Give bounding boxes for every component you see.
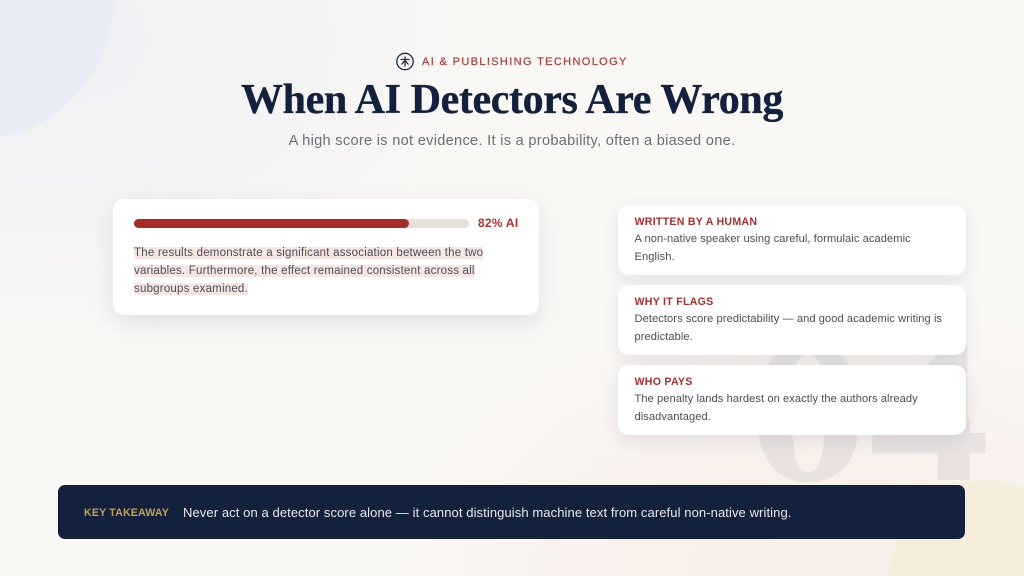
subtitle: A high score is not evidence. It is a probability, often a biased one. bbox=[289, 133, 735, 149]
takeaway banner bbox=[58, 485, 965, 539]
card body: Detectors score predictability — and good academic writing is bbox=[634, 313, 942, 325]
card heading: WHO PAYS bbox=[634, 376, 693, 388]
eyebrow label: AI & PUBLISHING TECHNOLOGY bbox=[422, 56, 628, 68]
eyebrow bbox=[396, 52, 628, 70]
highlighted sample text bbox=[134, 246, 483, 295]
highlighted sample text: The results demonstrate a significant association between the two bbox=[134, 246, 483, 258]
takeaway label: KEY TAKEAWAY bbox=[84, 506, 169, 518]
panel: detector result bbox=[113, 199, 539, 315]
card body: predictable. bbox=[634, 331, 693, 343]
score bar fill bbox=[134, 219, 409, 228]
card body: disadvantaged. bbox=[634, 411, 711, 423]
score bar track bbox=[134, 219, 469, 228]
card body bbox=[634, 233, 911, 263]
title: When AI Detectors Are Wrong bbox=[241, 77, 783, 123]
takeaway text: Never act on a detector score alone — it cannot distinguish machine text from careful non-native writing. bbox=[183, 504, 791, 520]
card body bbox=[634, 313, 942, 343]
card: written by a human bbox=[618, 205, 966, 275]
card heading: WHY IT FLAGS bbox=[634, 296, 713, 308]
decorative circle: top left bbox=[0, 0, 114, 137]
ghost number: 04 bbox=[748, 298, 990, 525]
card: who pays bbox=[618, 365, 966, 435]
highlighted sample text: subgroups examined. bbox=[134, 283, 248, 295]
icon: asterisk badge bbox=[396, 52, 414, 70]
decorative circle: bottom right bbox=[890, 480, 1024, 576]
card body: English. bbox=[634, 251, 675, 263]
card heading: WRITTEN BY A HUMAN bbox=[634, 216, 757, 228]
card body: A non-native speaker using careful, formulaic academic bbox=[634, 233, 911, 245]
score label: 82% AI bbox=[478, 216, 518, 230]
card: why it flags bbox=[618, 285, 966, 355]
card body: The penalty lands hardest on exactly the authors already bbox=[634, 393, 918, 405]
card body bbox=[634, 393, 918, 423]
highlighted sample text: variables. Furthermore, the effect remained consistent across all bbox=[134, 265, 475, 277]
